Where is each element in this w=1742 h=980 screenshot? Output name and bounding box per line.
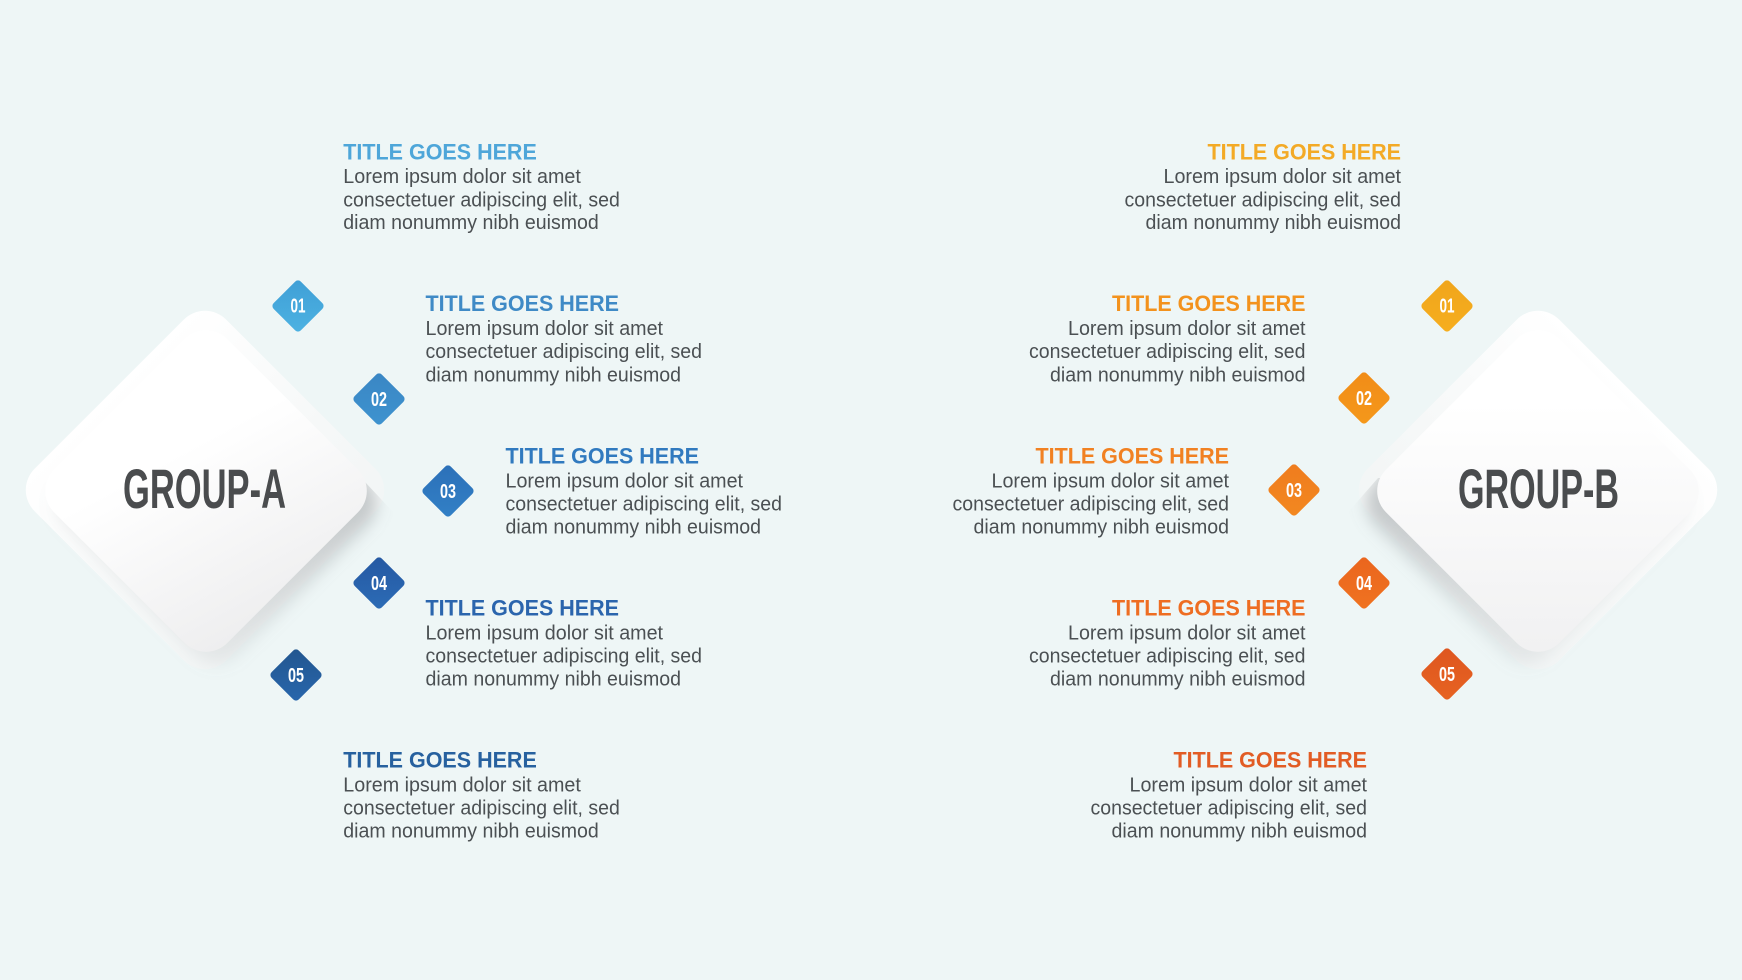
text block: B 02 (1029, 291, 1306, 386)
text block: B 04: Lorem ipsum dolor sit amet (1068, 622, 1306, 644)
heading: group B: GROUP-B (1458, 457, 1619, 520)
panel: group A card (26, 311, 382, 664)
heading: group A: GROUP-A (123, 457, 286, 520)
text block: A 05: Lorem ipsum dolor sit amet (343, 774, 581, 796)
text block: B 04: consectetuer adipiscing elit, sed (1029, 646, 1306, 668)
text block: B 01: diam nonummy nibh euismod (1146, 212, 1401, 234)
text block: B 04 (1029, 596, 1306, 690)
text block: A 05: consectetuer adipiscing elit, sed (343, 798, 620, 820)
title A 01: TITLE GOES HERE (343, 140, 537, 164)
text block: A 01: diam nonummy nibh euismod (343, 212, 599, 234)
title B 03: TITLE GOES HERE (1036, 444, 1229, 468)
title B 05: TITLE GOES HERE (1174, 748, 1367, 772)
icon: badge A 05 (269, 648, 323, 702)
text block: A 03: consectetuer adipiscing elit, sed (506, 494, 782, 516)
text block: B 05: Lorem ipsum dolor sit amet (1130, 774, 1367, 796)
text block: B 02: diam nonummy nibh euismod (1050, 364, 1306, 386)
text block: A 01: consectetuer adipiscing elit, sed (343, 190, 620, 212)
icon: badge A 01: 01 (290, 296, 306, 318)
icon: badge B 05 (1420, 647, 1474, 701)
text block: A 05: diam nonummy nibh euismod (343, 820, 599, 842)
icon: badge B 03: 03 (1286, 480, 1302, 502)
icon: badge A 05: 05 (288, 665, 304, 687)
text block: B 02: Lorem ipsum dolor sit amet (1068, 318, 1306, 340)
text block: A 02: Lorem ipsum dolor sit amet (426, 318, 663, 340)
text block: B 04: diam nonummy nibh euismod (1050, 668, 1306, 690)
text block: B 05: diam nonummy nibh euismod (1112, 820, 1367, 842)
icon: badge B 01: 01 (1440, 296, 1454, 318)
icon: badge B 04 (1337, 556, 1391, 610)
text block: A 01 (343, 140, 620, 234)
text block: B 01: Lorem ipsum dolor sit amet (1164, 166, 1401, 188)
title A 04: TITLE GOES HERE (426, 596, 619, 620)
text block: A 03: diam nonummy nibh euismod (506, 516, 761, 538)
icon: badge A 04 (352, 556, 406, 610)
title B 01: TITLE GOES HERE (1208, 140, 1401, 164)
text block: B 02: consectetuer adipiscing elit, sed (1029, 341, 1306, 363)
title B 04: TITLE GOES HERE (1112, 596, 1306, 620)
text block: A 02: consectetuer adipiscing elit, sed (426, 341, 702, 363)
icon: badge A 02: 02 (371, 389, 387, 411)
text block: A 04: Lorem ipsum dolor sit amet (426, 622, 663, 644)
text block: A 02 (426, 291, 702, 386)
icon: badge B 02: 02 (1356, 388, 1372, 410)
text block: A 04: consectetuer adipiscing elit, sed (426, 646, 702, 668)
text block: B 03: diam nonummy nibh euismod (974, 516, 1229, 538)
text block: B 03 (952, 444, 1229, 538)
text block: B 03: consectetuer adipiscing elit, sed (952, 494, 1229, 516)
title A 02: TITLE GOES HERE (426, 291, 619, 316)
icon: badge B 04: 04 (1356, 573, 1373, 595)
title A 05: TITLE GOES HERE (343, 748, 537, 772)
icon: badge B 05: 05 (1439, 664, 1455, 686)
text block: B 01: consectetuer adipiscing elit, sed (1124, 190, 1401, 212)
icon: badge A 04: 04 (371, 573, 388, 595)
text block: B 03: Lorem ipsum dolor sit amet (992, 470, 1229, 492)
text block: B 05 (1090, 748, 1367, 842)
icon: badge A 01 (271, 279, 325, 333)
text block: A 03: Lorem ipsum dolor sit amet (506, 470, 743, 492)
icon: badge A 03: 03 (440, 481, 456, 503)
text block: A 04 (426, 596, 702, 690)
icon: badge B 03 (1267, 463, 1321, 517)
icon: badge B 02 (1337, 371, 1391, 425)
title B 02: TITLE GOES HERE (1112, 291, 1306, 316)
text block: A 04: diam nonummy nibh euismod (426, 668, 681, 690)
icon: badge A 02 (352, 372, 406, 426)
text block: A 02: diam nonummy nibh euismod (426, 364, 681, 386)
text block: B 01 (1124, 140, 1401, 234)
icon: badge B 01 (1420, 279, 1474, 333)
text block: A 05 (343, 748, 620, 842)
text block: A 01: Lorem ipsum dolor sit amet (343, 166, 581, 188)
text block: B 05: consectetuer adipiscing elit, sed (1090, 798, 1367, 820)
panel: group B card (1360, 311, 1717, 664)
title A 03: TITLE GOES HERE (506, 444, 699, 468)
text block: A 03 (506, 444, 782, 538)
icon: badge A 03 (421, 464, 475, 518)
